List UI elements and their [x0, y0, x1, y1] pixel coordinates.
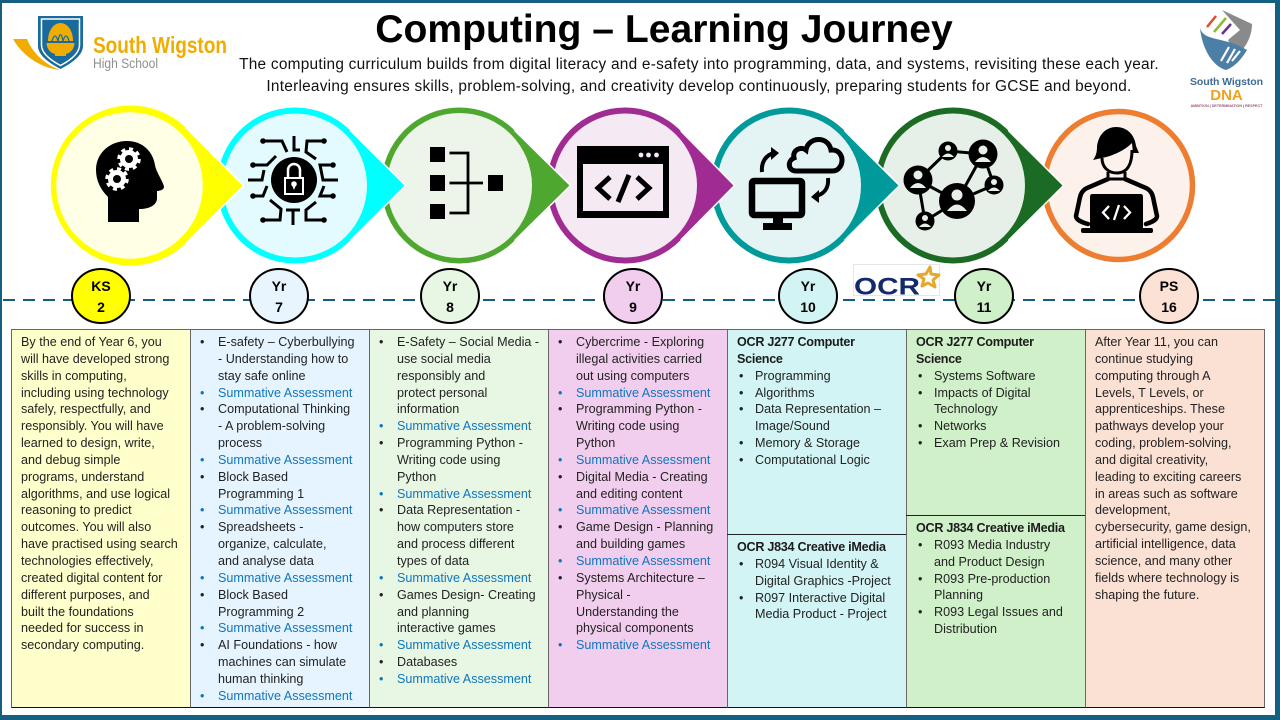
year badge: Yr 11: Yr: [977, 278, 992, 294]
Year 9 topic list: Physical -: [576, 588, 631, 602]
Year 8 topic list: use social media: [397, 352, 491, 366]
icon: padlock circuit: [248, 136, 338, 225]
Post-16 summary text: shaping the future.: [1095, 588, 1199, 602]
Post-16 summary text: apprenticeships. These: [1095, 402, 1225, 416]
Year 8 topic list: responsibly and: [397, 369, 485, 383]
Year 11 OCR J834 content: R093 Pre-production: [934, 572, 1050, 586]
Year 9 topic list: Summative Assessment: [576, 386, 710, 400]
Year 7 topic list: human thinking: [218, 672, 303, 686]
Year 8 topic list: Data Representation -: [397, 503, 520, 517]
Year 7 topic list: Summative Assessment: [218, 503, 352, 517]
Year 7 topic list: machines can simulate: [218, 655, 346, 669]
Year 8 topic list: E-Safety – Social Media -: [397, 335, 539, 349]
panel: Post-16: [1085, 329, 1265, 708]
Year 7 topic list: process: [218, 436, 262, 450]
Post-16 summary text: in areas such as software: [1095, 487, 1238, 501]
Post-16 summary text: and digital creativity,: [1095, 453, 1208, 467]
Year 10 OCR J834 content: [737, 540, 891, 621]
Year 8 topic list: and process different: [397, 537, 514, 551]
Year 11 OCR J277 content: Technology: [934, 402, 998, 416]
Year 7 topic list: Summative Assessment: [218, 621, 352, 635]
Year 10 OCR J277 content: Data Representation –: [755, 402, 881, 416]
Year 8 topic list: Summative Assessment: [397, 419, 531, 433]
Year 8 topic list: and planning: [397, 604, 469, 618]
Year 9 topic list: Summative Assessment: [576, 453, 710, 467]
year badge: Yr 10: 10: [800, 299, 816, 315]
icon: flow hierarchy: [430, 147, 503, 219]
Year 7 topic list: organize, calculate,: [218, 537, 327, 551]
Year 10 OCR J277 content: Science: [737, 352, 783, 366]
logo: South Wigston DNA: South Wigston: [1190, 76, 1263, 88]
Post-16 summary text: leading to exciting careers: [1095, 470, 1241, 484]
KS2 summary text: and debug simple: [21, 453, 120, 467]
dashed timeline: [3, 299, 1275, 301]
KS2 summary text: built the foundations: [21, 604, 134, 618]
Year 7 topic list: Spreadsheets -: [218, 520, 303, 534]
KS2 summary text: created digital content for: [21, 571, 162, 585]
Year 9 topic list: Python: [576, 436, 615, 450]
panel: Year 9: [548, 329, 728, 708]
year badge: PS 16: [1140, 269, 1198, 323]
KS2 summary text: including using technology: [21, 386, 169, 400]
Year 8 topic list: types of data: [397, 554, 469, 568]
Year 10 OCR J834 content: Digital Graphics -Project: [755, 574, 891, 588]
Year 9 topic list: Understanding the: [576, 604, 679, 618]
year badge: PS 16: 16: [1161, 299, 1177, 315]
Year 7 topic list: Block Based: [218, 588, 288, 602]
Year 11 OCR J834 content: R093 Legal Issues and: [934, 605, 1063, 619]
KS2 summary text: reasoning to predict: [21, 503, 132, 517]
Year 8 topic list: Summative Assessment: [397, 672, 531, 686]
Year 7 topic list: [200, 335, 354, 703]
year badge: Yr 10: Yr: [801, 278, 816, 294]
OCR logo: OCR: [854, 274, 920, 300]
stage marker: Year 11 dark green teardrop: [875, 108, 1064, 264]
Year 7 topic list: Computational Thinking: [218, 402, 350, 416]
Year 10 OCR J277 content: Algorithms: [755, 386, 814, 400]
year badge: Yr 9: 9: [629, 299, 637, 315]
Year 9 topic list: and editing content: [576, 487, 682, 501]
Year 10 OCR J277 content: Memory & Storage: [755, 436, 860, 450]
logo: South Wigston DNA: [1190, 10, 1263, 108]
KS2 summary text: algorithms, and use logical: [21, 487, 170, 501]
Year 8 topic list: interactive games: [397, 621, 496, 635]
Year 7 topic list: Programming 1: [218, 487, 304, 501]
year badge: KS2: [72, 269, 130, 323]
KS2 summary text: secondary computing.: [21, 638, 144, 652]
Post-16 summary text: development,: [1095, 503, 1171, 517]
KS2 summary text: different purposes, and: [21, 588, 150, 602]
Year 7 topic list: Programming 2: [218, 604, 304, 618]
Year 10 OCR J834 content: OCR J834 Creative iMedia: [737, 540, 886, 554]
Year 7 topic list: and analyse data: [218, 554, 314, 568]
logo: South Wigston High School: [13, 16, 227, 71]
Year 9 topic list: illegal activities carried: [576, 352, 702, 366]
Year 10 OCR J834 content: R094 Visual Identity &: [755, 557, 879, 571]
logo: South Wigston High School: High School: [93, 56, 158, 71]
Year 8 topic list: Summative Assessment: [397, 571, 531, 585]
Post-16 summary text: cybersecurity, game design,: [1095, 520, 1251, 534]
year badge: KS2: KS: [91, 278, 111, 294]
Year 9 topic list: Programming Python -: [576, 402, 702, 416]
KS2 summary text: technologies effectively,: [21, 554, 154, 568]
Year 9 topic list: Summative Assessment: [576, 503, 710, 517]
Post-16 summary text: After Year 11, you can: [1095, 335, 1218, 349]
KS2 summary text: needed for success in: [21, 621, 144, 635]
Year 11 OCR J834 content: Planning: [934, 588, 983, 602]
KS2 summary text: will have developed strong: [21, 352, 169, 366]
Year 7 topic list: Block Based: [218, 470, 288, 484]
KS2 summary text: By the end of Year 6, you: [21, 335, 162, 349]
year badge: Yr 9: Yr: [626, 278, 641, 294]
Year 11 OCR J277 content: Impacts of Digital: [934, 386, 1031, 400]
Year 8 topic list: Summative Assessment: [397, 638, 531, 652]
panel: Year 8: [369, 329, 549, 708]
year badge: Yr 7: Yr: [272, 278, 287, 294]
Year 9 topic list: Digital Media - Creating: [576, 470, 708, 484]
logo: South Wigston DNA: DNA: [1210, 87, 1243, 104]
Year 10 OCR J277 content: Computational Logic: [755, 453, 870, 467]
Year 10 OCR J834 content: R097 Interactive Digital: [755, 591, 885, 605]
Year 9 topic list: Summative Assessment: [576, 554, 710, 568]
Year 9 topic list: Systems Architecture –: [576, 571, 705, 585]
Post-16 summary text: [1095, 335, 1251, 602]
logo: South Wigston DNA: AMBITION | DETERMINATION | RESPECT: [1190, 104, 1263, 108]
KS2 summary text: safely, respectfully, and: [21, 402, 151, 416]
Post-16 summary text: artificial intelligence, data: [1095, 537, 1236, 551]
Year 10 OCR J277 content: OCR J277 Computer: [737, 335, 855, 349]
Year 9 topic list: Writing code using: [576, 419, 679, 433]
Post-16 summary text: Levels, T Levels, or: [1095, 386, 1204, 400]
Year 9 topic list: physical components: [576, 621, 694, 635]
Year 9 topic list: Cybercrime - Exploring: [576, 335, 704, 349]
KS2 summary text: programs, understand: [21, 470, 144, 484]
Year 7 topic list: - A problem-solving: [218, 419, 325, 433]
Post-16 summary text: continue studying: [1095, 352, 1193, 366]
year badge: Yr 8: [421, 269, 479, 323]
KS2 summary text: responsibly. You will have: [21, 419, 164, 433]
logo: South Wigston High School: South Wigston: [93, 32, 227, 58]
Year 8 topic list: protect personal: [397, 386, 487, 400]
Year 11 OCR J834 content: Distribution: [934, 622, 997, 636]
Year 8 topic list: information: [397, 402, 459, 416]
title: Computing – Learning Journey: [375, 8, 953, 51]
stage marker: Year 10 teal teardrop: [711, 108, 900, 264]
year badge: Yr 8: 8: [446, 299, 454, 315]
Post-16 summary text: computing through A: [1095, 369, 1211, 383]
icon: head with gears: [96, 141, 164, 222]
year badge: Yr 7: 7: [275, 299, 283, 315]
Year 10 OCR J277 content: Programming: [755, 369, 831, 383]
stage marker: Year 8 green teardrop: [381, 108, 570, 264]
Year 8 topic list: how computers store: [397, 520, 514, 534]
year badge: KS2: 2: [97, 299, 105, 315]
Year 10 OCR J834 content: Media Product - Project: [755, 607, 887, 621]
stage marker: post-16 orange circle: [1044, 112, 1192, 260]
intro text: The computing curriculum builds from digital literacy and e-safety into programming, data, and systems, revisiting these each year.: [239, 56, 1159, 73]
Post-16 summary text: fields where technology is: [1095, 571, 1239, 585]
Year 8 topic list: [380, 335, 539, 686]
OCR logo: [854, 264, 940, 300]
Year 11 OCR J834 content: R093 Media Industry: [934, 538, 1050, 552]
Year 11 OCR J277 content: Networks: [934, 419, 986, 433]
Year 7 topic list: Summative Assessment: [218, 689, 352, 703]
intro text: [239, 56, 1159, 94]
Year 7 topic list: - Understanding how to: [218, 352, 348, 366]
Year 8 topic list: Databases: [397, 655, 457, 669]
KS2 summary text: [21, 335, 178, 652]
Year 10 OCR J277 content: Image/Sound: [755, 419, 830, 433]
Year 8 topic list: Writing code using: [397, 453, 500, 467]
KS2 summary text: have practised using search: [21, 537, 178, 551]
Year 11 OCR J834 content: and Product Design: [934, 555, 1045, 569]
Post-16 summary text: science, and many other: [1095, 554, 1232, 568]
KS2 summary text: learned to design, write,: [21, 436, 155, 450]
stage marker: KS2 yellow teardrop: [51, 106, 244, 266]
stage marker: Year 7 cyan teardrop: [217, 108, 406, 264]
Year 8 topic list: Programming Python -: [397, 436, 523, 450]
KS2 summary text: skills in computing,: [21, 369, 127, 383]
panel: Year 11: [906, 329, 1086, 708]
Year 9 topic list: out using computers: [576, 369, 689, 383]
year badge: Yr 11: [955, 269, 1013, 323]
Year 7 topic list: stay safe online: [218, 369, 306, 383]
icon: people network: [904, 140, 1004, 230]
Year 7 topic list: E-safety – Cyberbullying: [218, 335, 354, 349]
panel: KS2: [11, 329, 191, 708]
Year 8 topic list: Summative Assessment: [397, 487, 531, 501]
Year 8 topic list: Games Design- Creating: [397, 588, 536, 602]
Year 7 topic list: Summative Assessment: [218, 571, 352, 585]
Year 8 topic list: Python: [397, 470, 436, 484]
year badge: PS 16: PS: [1160, 278, 1178, 294]
Year 11 OCR J834 content: OCR J834 Creative iMedia: [916, 521, 1065, 535]
Post-16 summary text: coding, problem-solving,: [1095, 436, 1232, 450]
Year 7 topic list: Summative Assessment: [218, 386, 352, 400]
year badge: Yr 9: [604, 269, 662, 323]
Year 7 topic list: Summative Assessment: [218, 453, 352, 467]
Year 9 topic list: and building games: [576, 537, 685, 551]
Year 9 topic list: [558, 335, 713, 652]
panel: Year 7: [190, 329, 370, 708]
icon: computer and cloud sync: [752, 139, 842, 230]
icon: programmer at laptop: [1076, 127, 1157, 233]
Year 11 OCR J277 content: Systems Software: [934, 369, 1035, 383]
Year 11 OCR J277 content: [916, 335, 1060, 450]
Year 9 topic list: Summative Assessment: [576, 638, 710, 652]
Year 7 topic list: AI Foundations - how: [218, 638, 337, 652]
Year 11 OCR J834 content: [916, 521, 1066, 636]
stage marker: Year 9 purple teardrop: [547, 108, 734, 264]
Year 11 OCR J277 content: Science: [916, 352, 962, 366]
year badge: Yr 8: Yr: [443, 278, 458, 294]
Year 11 OCR J277 content: OCR J277 Computer: [916, 335, 1034, 349]
intro text: Interleaving ensures skills, problem-solving, and creativity develop continuously, preparing students for GCSE and beyond.: [266, 78, 1132, 94]
KS2 summary text: outcomes. You will also: [21, 520, 151, 534]
year badge: Yr 10: [779, 269, 837, 323]
year badge: Yr 11: 11: [977, 299, 992, 315]
panel: Year 10: [727, 329, 907, 708]
year badge: Yr 7: [250, 269, 308, 323]
Post-16 summary text: pathways develop your: [1095, 419, 1224, 433]
icon: code window: [577, 146, 669, 218]
Year 10 OCR J277 content: [737, 335, 881, 467]
Year 9 topic list: Game Design - Planning: [576, 520, 713, 534]
Year 11 OCR J277 content: Exam Prep & Revision: [934, 436, 1060, 450]
